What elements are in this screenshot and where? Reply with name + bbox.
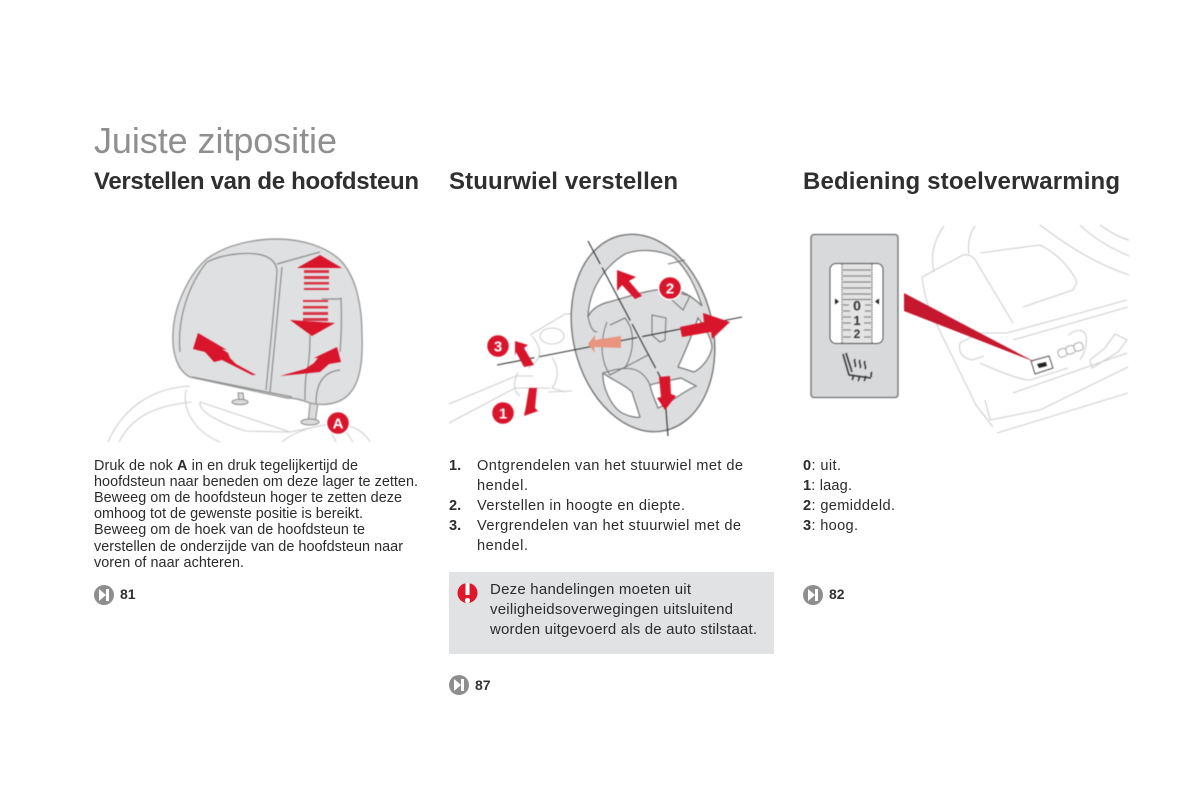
page reference 81: 81 [120,586,136,602]
callout text: Deze handelingen moeten uit [490,581,692,598]
text: headrest instructions [94,458,418,571]
text: steering wheel steps: 3. [449,518,461,534]
seat outlines [922,225,1129,433]
page reference 82: 82 [829,586,845,602]
illustration: steering wheel [449,220,742,446]
arrow: lever down [524,388,538,416]
heading: headrest: Verstellen van de hoofdsteun [94,168,419,195]
text: headrest instructions: voren of naar achteren. [94,555,244,571]
heating control panel [811,234,898,398]
heated seat switch on seat [1031,356,1053,374]
illustration: headrest [108,239,370,442]
wheel openings [588,250,712,417]
page reference 82 [803,585,845,605]
text: headrest instructions: Beweeg om de hoek van de hoofdsteun te [94,522,365,538]
steering column [449,314,578,423]
badge 2: 2 [666,280,674,298]
text: steering wheel steps: 2. [449,498,461,514]
arrow: tilt right [280,347,341,376]
badge 1 [492,402,514,424]
cushion seams [180,252,341,404]
badge 3 [486,334,510,358]
text: headrest instructions: verstellen de onderzijde van de hoofdsteun naar [94,539,403,555]
text: headrest instructions: hoofdsteun naar beneden om deze lager te zetten. [94,474,418,490]
callout text [489,581,757,638]
page reference 87 [449,675,491,695]
badge 3: 3 [494,338,502,356]
thumbwheel window [830,264,883,344]
panel background [811,234,898,398]
arrow: down [657,376,676,410]
text: heating levels: 2: gemiddeld. [803,498,895,514]
text: heating levels: 3: hoog. [803,518,858,534]
seat back outline [108,386,370,442]
thumbwheel: 2 [854,327,861,341]
text: steering wheel steps: hendel. [477,478,528,494]
text: headrest instructions: omhoog tot de gewenste positie is bereikt. [94,506,363,522]
text: steering wheel steps: Ontgrendelen van het stuurwiel met de [477,458,743,474]
title: Juiste zitpositie [94,120,337,161]
arrow: forward [680,313,730,339]
text: steering wheel steps [449,458,743,554]
level markers [835,298,879,304]
thumbwheel: 0 [853,298,861,314]
arrow: lever up [515,341,534,367]
text: headrest instructions: Beweeg om de hoofdsteun hoger te zetten deze [94,490,402,506]
arrow: down [290,300,335,336]
text: steering wheel steps: hendel. [477,538,528,554]
text: heating levels [803,458,895,534]
wheel hub detail [588,260,690,385]
page reference 87: 87 [475,677,491,693]
heading: seat heating: Bediening stoelverwarming [803,168,1120,195]
pointer wedge [904,293,1035,362]
switch row [1057,342,1084,358]
icon: heated seat [843,353,872,381]
page reference 81 [94,585,136,605]
arrow: backward faded [588,335,621,353]
callout text: veiligheidsoverwegingen uitsluitend [490,601,733,618]
icon: warning [458,583,478,603]
heading: steering wheel: Stuurwiel verstellen [449,168,678,195]
thumbwheel: 1 [853,313,861,328]
text: headrest instructions: Druk de nok A in en druk tegelijkertijd de [94,458,358,474]
callout background [449,572,774,654]
arrow: tilt left [193,333,256,375]
text: steering wheel steps: Verstellen in hoogte en diepte. [477,498,685,514]
headrest posts [232,393,319,425]
text: steering wheel steps: 1. [449,458,461,474]
axis lines [497,241,742,436]
badge 1: 1 [499,406,507,422]
callout: safety warning [449,572,774,654]
badge A [326,412,350,434]
illustration: seat [904,225,1129,433]
arrow: up [297,255,342,290]
text: heating levels: 0: uit. [803,458,841,474]
callout text: worden uitgevoerd als de auto stilstaat. [489,621,757,638]
badge A: A [333,416,344,432]
text: steering wheel steps: Vergrendelen van het stuurwiel met de [477,518,741,534]
badge 2 [658,276,682,300]
wheel rim [552,220,734,446]
text: heating levels: 1: laag. [803,478,852,494]
arrow: up along axis [617,270,642,299]
thumbwheel [842,264,872,343]
headrest cushion [173,239,362,404]
